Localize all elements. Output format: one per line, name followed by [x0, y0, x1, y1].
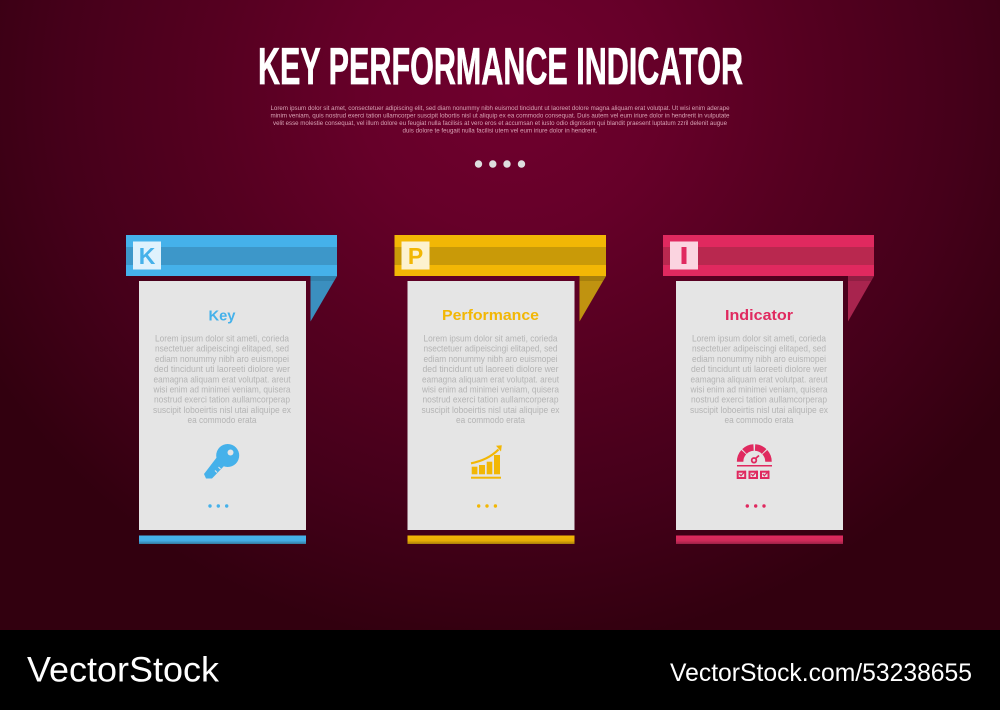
card: key: [139, 281, 306, 530]
footer logo: VectorStock: [27, 650, 219, 690]
intro paragraph: minim veniam, quis nostrud exerci tation ullamcorper suscipit lobortis nisl ut aliquip ex ea commodo consequat. Duis autem vel eum iriure dolor in hendrerit in vulputate: [270, 112, 730, 120]
body text: performance: ded tincidunt uti laoreeti diolore wer: [422, 364, 558, 375]
body text: indicator: nsectetuer adipeiscingi elitaped, sed: [692, 344, 826, 355]
intro paragraph: [270, 105, 730, 134]
header ribbon: key: [126, 235, 337, 276]
body text: indicator: Lorem ipsum dolor sit ameti, corieda: [692, 334, 827, 344]
bottom bar: performance: [408, 536, 574, 544]
card: indicator: [676, 281, 843, 530]
body text: key: wisi enim ad minimei veniam, quisera: [153, 384, 291, 396]
body text: key: [153, 334, 291, 426]
dots: indicator: [746, 504, 766, 508]
body text: performance: ea commodo erata: [456, 415, 526, 426]
icon: growth chart: [471, 445, 502, 479]
badge: P: [402, 242, 430, 270]
fold: key: [310, 276, 337, 322]
panel: key: [126, 235, 337, 544]
panel: indicator: [663, 235, 874, 544]
body text: key: ded tincidunt uti laoreeti diolore wer: [154, 364, 290, 375]
badge: P: P: [408, 243, 423, 269]
body text: key: eamagna aliquam erat volutpat. areut: [154, 374, 291, 385]
body text: performance: eamagna aliquam erat volutpat. areut: [422, 374, 559, 385]
body text: indicator: ediam nonummy nibh aro euismopei: [692, 354, 826, 365]
header ribbon: performance: [394, 235, 606, 276]
body text: performance: wisi enim ad minimei veniam, quisera: [421, 384, 560, 396]
body text: indicator: wisi enim ad minimei veniam, quisera: [690, 384, 828, 396]
icon: key: [204, 444, 239, 478]
body text: performance: ediam nonummy nibh aro euismopei: [424, 354, 558, 365]
body text: performance: [421, 334, 560, 426]
intro paragraph: Lorem ipsum dolor sit amet, consectetuer adipiscing elit, sed diam nonummy nibh euismod tincidunt ut laoreet dolore magna aliquam erat volutpat. Ut wisi enim aderape: [270, 105, 730, 112]
body text: indicator: suscipit loboeirtis nisl utai aliquipe ex: [690, 405, 828, 416]
body text: key: nostrud exerci tation aullamcorperap: [154, 395, 290, 406]
pagination dots: [475, 160, 525, 168]
card: performance: [408, 281, 574, 530]
body text: key: nsectetuer adipeiscingi elitaped, sed: [155, 344, 289, 355]
body text: performance: nsectetuer adipeiscingi elitaped, sed: [424, 344, 558, 355]
badge: K: [133, 242, 161, 270]
bottom bar: key: [139, 536, 306, 544]
panel: performance: [394, 235, 606, 544]
heading: performance: Performance: [442, 307, 539, 324]
body text: indicator: ded tincidunt uti laoreeti diolore wer: [691, 364, 827, 375]
bottom bar: indicator: [676, 536, 843, 544]
dots: key: [208, 504, 228, 508]
icon: gauge with checklist: [737, 448, 772, 478]
body text: performance: nostrud exerci tation aullamcorperap: [422, 395, 558, 406]
footer band: [0, 630, 1000, 710]
intro paragraph: duis dolore te feugait nulla facilisi utem vel eum iriure dolor in hendrerit.: [402, 128, 598, 134]
header ribbon: indicator: [663, 235, 874, 276]
body text: performance: Lorem ipsum dolor sit ameti, corieda: [424, 334, 558, 344]
body text: indicator: eamagna aliquam erat volutpat. areut: [690, 374, 828, 385]
body text: indicator: ea commodo erata: [724, 415, 794, 426]
fold: performance: [580, 276, 606, 322]
body text: key: suscipit loboeirtis nisl utai aliquipe ex: [153, 405, 291, 416]
body text: indicator: [690, 334, 828, 426]
body text: key: ediam nonummy nibh aro euismopei: [155, 354, 289, 365]
badge: K: K: [139, 243, 156, 269]
heading: key: Key: [208, 308, 236, 324]
body text: performance: suscipit loboeirtis nisl utai aliquipe ex: [422, 405, 560, 416]
body text: key: ea commodo erata: [188, 415, 257, 426]
badge: I: [670, 242, 698, 270]
intro paragraph: velit esse molestie consequat, vel illum dolore eu feugiat nulla facilisis at vero eros et accumsan et iusto odio dignissim qui blandit praesent luptatum zzril delenit augue: [273, 120, 727, 127]
footer image id: VectorStock.com/53238655: [670, 659, 972, 687]
body text: indicator: nostrud exerci tation aullamcorperap: [691, 395, 827, 406]
dots: performance: [477, 504, 497, 508]
fold: indicator: [848, 276, 874, 322]
body text: key: Lorem ipsum dolor sit ameti, corieda: [155, 334, 290, 344]
heading: indicator: Indicator: [725, 307, 793, 324]
